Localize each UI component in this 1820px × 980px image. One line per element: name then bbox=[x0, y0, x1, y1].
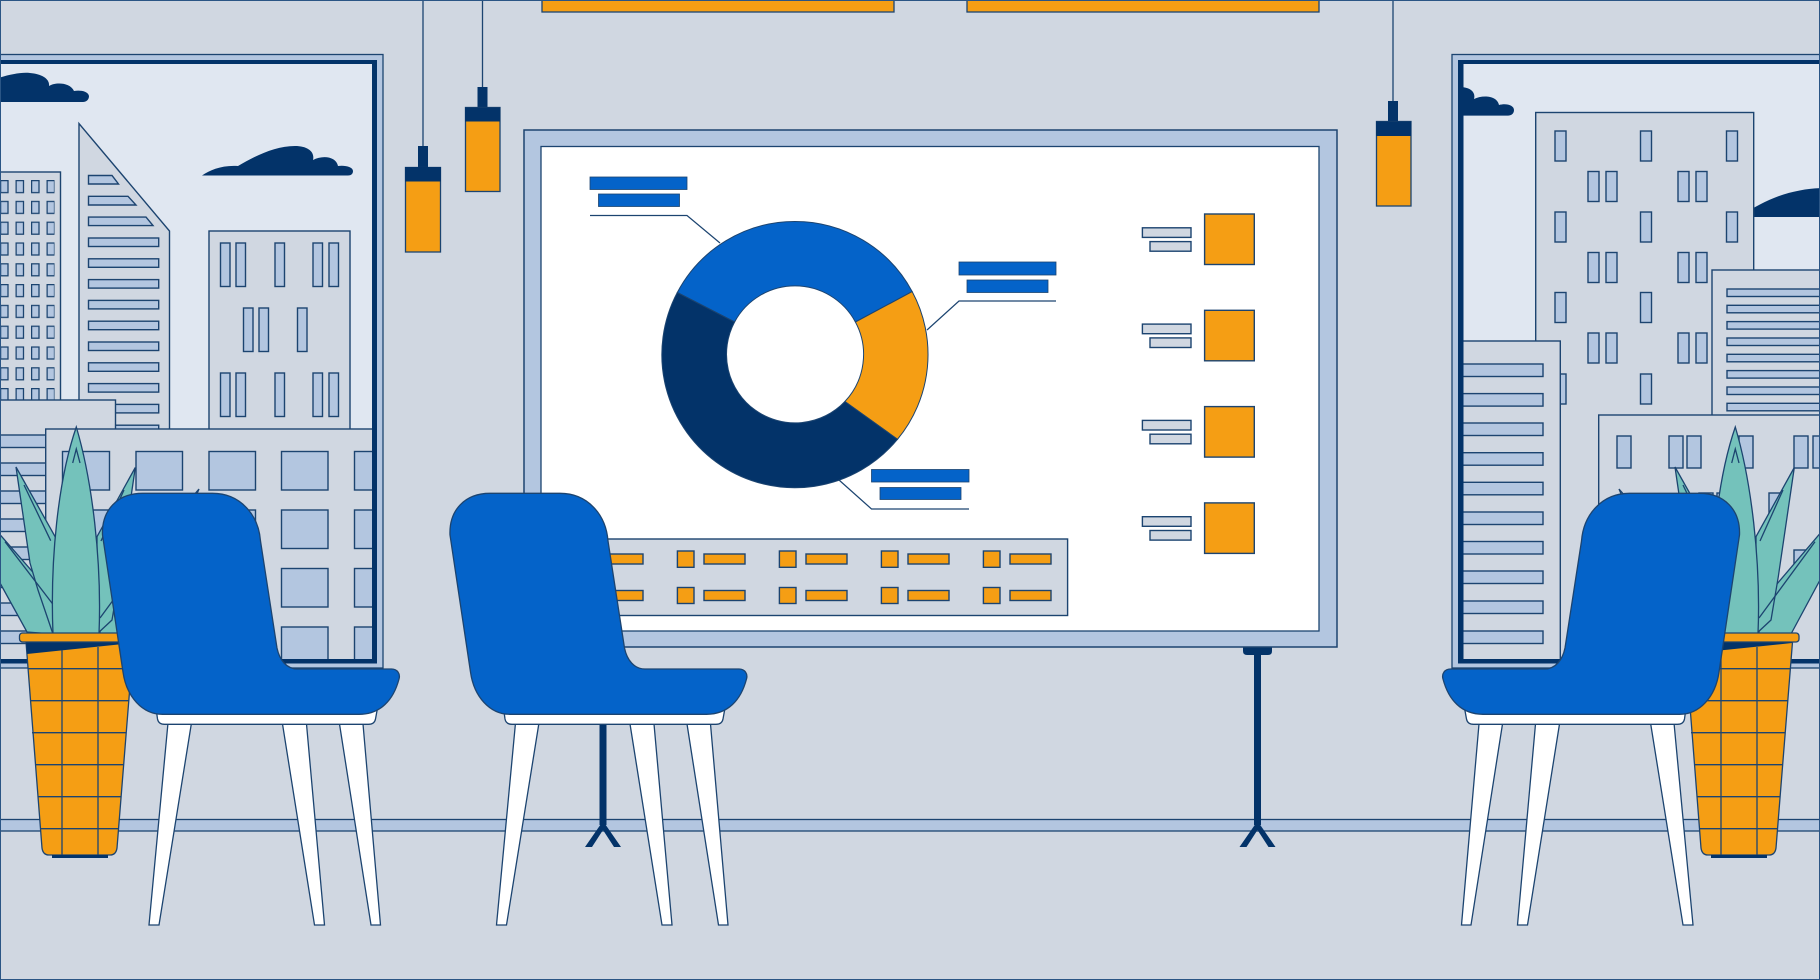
chair legs bbox=[496, 724, 728, 925]
leaves bbox=[0, 427, 199, 634]
grid building bbox=[1, 171, 62, 400]
chair legs bbox=[149, 724, 380, 925]
pendant lamp 3 bbox=[1376, 0, 1411, 206]
chair base bbox=[1464, 708, 1686, 724]
chair seat and back bbox=[102, 493, 399, 714]
presentation board bbox=[524, 130, 1337, 647]
chair left bbox=[102, 493, 399, 925]
left window bbox=[0, 54, 386, 677]
plant left bbox=[0, 427, 199, 858]
striped right building bbox=[1712, 270, 1820, 430]
striped front building bbox=[0, 400, 116, 665]
plant right bbox=[1619, 427, 1820, 858]
clouds bbox=[1460, 87, 1820, 217]
angled tower bbox=[79, 124, 170, 435]
pot rim bbox=[20, 633, 140, 642]
pot grid bbox=[28, 647, 131, 855]
callout top left bbox=[590, 177, 720, 243]
pot shadow bbox=[26, 642, 133, 654]
ceiling light panels bbox=[542, 0, 1319, 12]
data table bbox=[560, 539, 1068, 616]
chair seat and back bbox=[450, 493, 747, 714]
orange segment bbox=[845, 292, 928, 439]
callout bottom bbox=[839, 470, 969, 509]
pot base bbox=[1711, 855, 1767, 858]
tall building bbox=[1536, 112, 1754, 672]
chair base bbox=[504, 708, 725, 724]
board stand right bbox=[1240, 647, 1276, 847]
wide front building bbox=[45, 428, 372, 659]
leaves bbox=[1619, 427, 1820, 634]
board screen bbox=[541, 146, 1319, 631]
chair seat and back bbox=[1443, 493, 1740, 714]
pot grid bbox=[1687, 647, 1790, 855]
pendant lamp 1 bbox=[405, 0, 441, 252]
board stand left bbox=[585, 640, 621, 847]
clouds bbox=[0, 73, 353, 176]
left window frame bbox=[0, 54, 383, 668]
pot rim bbox=[1678, 633, 1799, 642]
legend list bbox=[1142, 214, 1254, 553]
navy segment bbox=[662, 292, 898, 488]
pot base bbox=[52, 855, 108, 858]
right window frame bbox=[1452, 54, 1820, 668]
pendant lamp 2 bbox=[465, 0, 500, 192]
left city view bbox=[0, 73, 386, 677]
blue segment bbox=[677, 221, 912, 322]
chair center bbox=[450, 493, 747, 925]
chair legs bbox=[1462, 724, 1693, 925]
pot bbox=[1685, 642, 1792, 855]
pot shadow bbox=[1685, 642, 1792, 654]
donut chart bbox=[662, 221, 928, 488]
pot bbox=[26, 642, 134, 855]
chair base bbox=[156, 708, 378, 724]
callout right bbox=[927, 262, 1056, 330]
right city view bbox=[1455, 87, 1820, 675]
mid building bbox=[209, 231, 350, 441]
wide front building bbox=[1599, 415, 1820, 675]
board frame bbox=[524, 130, 1337, 647]
striped left building bbox=[1464, 340, 1561, 659]
right window bbox=[1452, 54, 1820, 675]
chair right bbox=[1443, 493, 1740, 925]
baseboard bbox=[0, 820, 1820, 831]
